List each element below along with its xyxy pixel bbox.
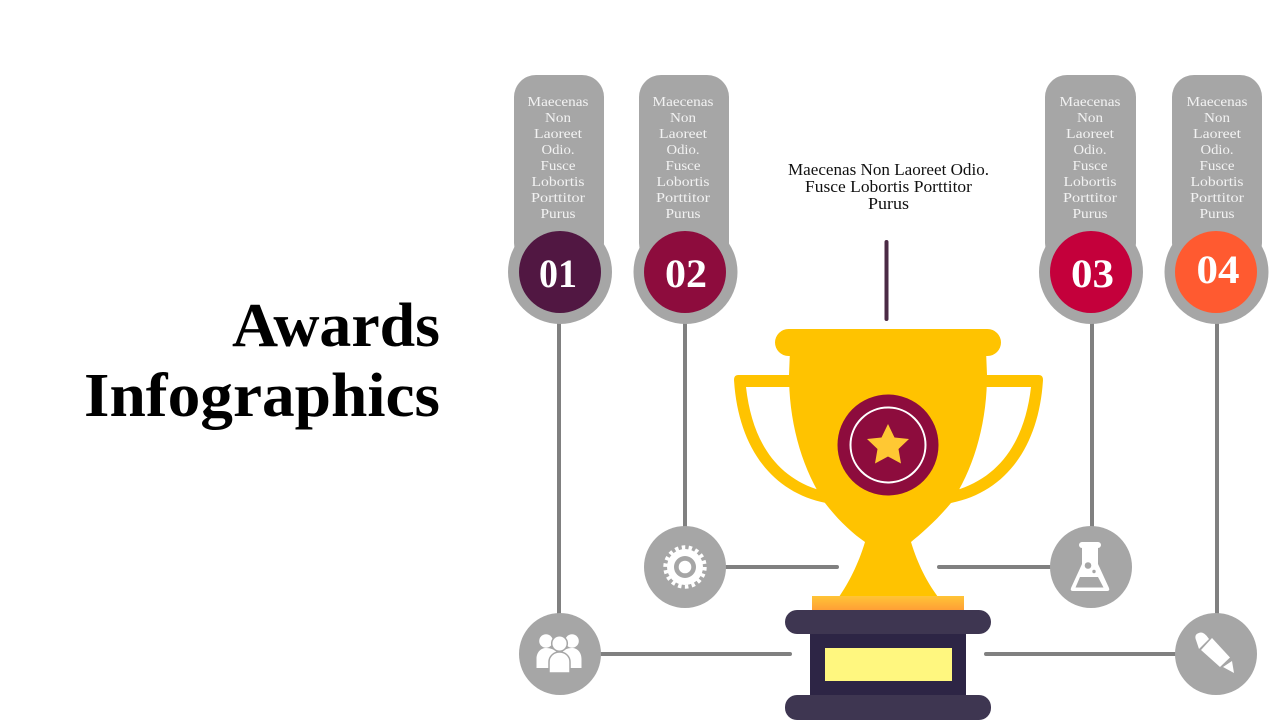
- panel: step 03: [1039, 75, 1143, 324]
- trophy handles: [734, 375, 1043, 503]
- step 04 text: Fusce: [1200, 159, 1234, 174]
- step 04 text: Purus: [1200, 207, 1234, 222]
- step 02 text: [652, 95, 714, 222]
- central text block: Fusce Lobortis Porttitor: [805, 177, 972, 196]
- step 04 badge: [1175, 231, 1257, 313]
- step 01 text: Porttitor: [531, 191, 585, 206]
- step 01 text: Purus: [540, 207, 576, 222]
- step 04 text: Laoreet: [1193, 127, 1241, 142]
- step 01 text: Odio.: [542, 143, 574, 158]
- central text block: Purus: [868, 194, 909, 213]
- step 03 text: Odio.: [1074, 143, 1106, 158]
- step 03 badge: [1050, 231, 1132, 313]
- step 04 text: Odio.: [1200, 143, 1234, 158]
- step 04 text: Maecenas: [1186, 95, 1248, 110]
- central pointer line: [884, 242, 888, 319]
- step 02 badge: 02: [665, 251, 707, 296]
- panel: step 02: [634, 75, 738, 324]
- trophy base: [785, 596, 991, 720]
- step 02 badge: [644, 231, 726, 313]
- title: Infographics: [84, 362, 440, 430]
- title: [84, 292, 440, 430]
- step 04 text: Porttitor: [1190, 191, 1244, 206]
- panel: step 04: [1164, 75, 1268, 324]
- trophy medal: [838, 394, 938, 496]
- step 01 text: [528, 95, 588, 222]
- trophy: [734, 329, 1043, 720]
- step 03 text: [1060, 95, 1120, 222]
- panel: step 01: [508, 75, 612, 324]
- step 01 text: Laoreet: [534, 127, 582, 142]
- step 03 text: Porttitor: [1063, 191, 1117, 206]
- step 02 text: Porttitor: [656, 191, 710, 206]
- step 02 text: Laoreet: [659, 127, 707, 142]
- step 04 text: Non: [1204, 111, 1230, 126]
- step 02 text: Fusce: [666, 159, 700, 174]
- step 01 text: Fusce: [540, 159, 576, 174]
- icon: pencil: [1175, 613, 1257, 695]
- step 01 text: Maecenas: [528, 95, 588, 110]
- step 03 text: Lobortis: [1064, 175, 1116, 190]
- step 01 text: Non: [545, 111, 571, 126]
- step 03 text: Laoreet: [1066, 127, 1114, 142]
- central text block: Maecenas Non Laoreet Odio.: [788, 160, 989, 179]
- step 04 text: [1186, 95, 1248, 222]
- central text block: [788, 160, 989, 213]
- trophy cup: [775, 329, 1001, 597]
- icon: flask: [1050, 526, 1132, 608]
- step 03 text: Non: [1077, 111, 1103, 126]
- step 04 text: Lobortis: [1190, 175, 1244, 190]
- connector lines: [559, 320, 1217, 654]
- step 02 text: Maecenas: [652, 95, 714, 110]
- step 02 text: Purus: [666, 207, 700, 222]
- icon: gear: [644, 526, 726, 608]
- step 02 text: Non: [670, 111, 696, 126]
- step 01 badge: 01: [539, 251, 577, 296]
- step 03 text: Purus: [1072, 207, 1108, 222]
- title: Awards: [232, 292, 440, 360]
- step 03 text: Maecenas: [1060, 95, 1120, 110]
- step 01 text: Lobortis: [532, 175, 584, 190]
- step 03 badge: 03: [1071, 251, 1114, 296]
- step 02 text: Odio.: [666, 143, 700, 158]
- icon: people: [519, 613, 601, 695]
- step 03 text: Fusce: [1072, 159, 1108, 174]
- step 04 badge: 04: [1196, 247, 1240, 292]
- step 01 badge: [519, 231, 601, 313]
- step 02 text: Lobortis: [656, 175, 710, 190]
